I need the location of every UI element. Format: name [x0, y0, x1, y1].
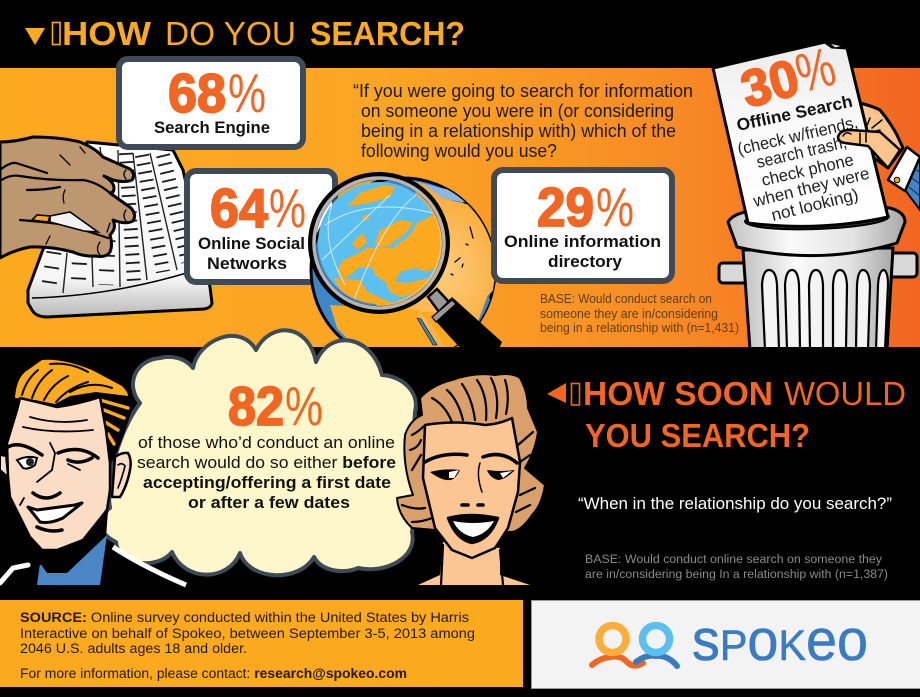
cloud text: 82% — [137, 375, 396, 512]
callout: 29% online information directory — [494, 170, 672, 281]
illustration: thumb, cuff and sleeve — [838, 118, 920, 210]
question text — [353, 81, 693, 161]
callout: 64% online social networks: 64 — [210, 177, 268, 239]
callout: 29% online information directory: directory — [548, 252, 623, 271]
icon: two linked people — [592, 626, 677, 666]
can handles — [719, 253, 917, 283]
base note: search question: being in a relationship with (n=1,431) — [540, 321, 739, 335]
panel: how do you search band — [0, 68, 920, 347]
callout: 68% search engine: % — [228, 62, 266, 124]
hand — [0, 137, 135, 258]
callout: 64% online social networks — [187, 171, 335, 282]
thought cloud — [101, 330, 416, 575]
heading: how do you search: HOW — [62, 15, 152, 52]
can ribs — [762, 270, 888, 350]
cloud text: 82%: accepting/offering a first date — [143, 474, 391, 492]
question: when in the relationship: “When in the relationship do you search?” — [578, 494, 892, 513]
paper: 30% offline search: when they were — [750, 164, 871, 211]
globe — [311, 178, 497, 362]
heading: how do you search — [25, 15, 465, 52]
paper: 30% offline search: % — [789, 35, 842, 105]
callout: 64% online social networks: Online Social — [198, 234, 305, 253]
magnifier handle — [426, 287, 502, 347]
cloud text: 82%: 82 — [228, 375, 284, 437]
callout: 68% search engine: Search Engine — [154, 118, 270, 137]
heading: how soon would you search: WOULD — [784, 375, 906, 412]
base note: search question — [540, 292, 739, 335]
illustration: winking man — [0, 359, 186, 585]
paper: 30% offline search: (check w/friends, — [736, 113, 860, 159]
panel: source: Interactive on behalf of Spokeo, between September 3-5, 2013 among — [20, 626, 475, 641]
can rim — [728, 204, 905, 256]
question text: following would you use? — [361, 141, 557, 161]
callout: 68% search engine: 68 — [168, 62, 226, 124]
keyboard — [28, 142, 212, 317]
paper: 30% offline search: not looking) — [769, 185, 860, 225]
heading: how soon would you search: YOU SEARCH? — [585, 417, 810, 454]
panel: source: SOURCE: Online survey conducted within the United States by Harris — [20, 610, 469, 625]
question text: on someone you were in (or considering — [361, 101, 674, 121]
illustration: hand holding paper (back) — [850, 103, 903, 168]
callout: 64% online social networks: % — [269, 177, 306, 239]
heading: how do you search: SEARCH? — [310, 15, 465, 52]
base note: search question: BASE: Would conduct search on — [540, 292, 712, 306]
cloud text: 82%: of those who’d conduct an online — [138, 434, 395, 452]
base note: online search — [585, 554, 888, 581]
illustration: smiling woman — [397, 374, 545, 585]
paper: 30% offline search: search trash, — [755, 133, 849, 172]
base note: online search: BASE: Would conduct online search on someone they — [585, 554, 882, 566]
panel: source: For more information, please contact: research@spokeo.com — [20, 666, 407, 681]
base note: online search: are in/considering being In a relationship with (n=1,387) — [585, 569, 888, 581]
callout: 68% search engine — [119, 59, 303, 147]
cloud text: 82%: or after a few dates — [188, 494, 350, 512]
panel: source — [0, 600, 523, 687]
heading: how do you search: DO YOU — [165, 15, 296, 52]
callout: 29% online information directory: Online information — [504, 232, 661, 251]
base note: search question: someone they are in/considering — [540, 307, 718, 321]
callout: 29% online information directory: 29 — [537, 176, 594, 238]
illustration: globe with magnifying glass — [311, 176, 502, 362]
question text: “If you were going to search for information — [353, 81, 693, 101]
callout: 29% online information directory: % — [596, 176, 634, 238]
paper: 30% offline search — [713, 35, 888, 226]
heading: how soon would you search: HOW SOON — [583, 375, 773, 412]
illustration: trash can — [719, 204, 917, 350]
callout: 64% online social networks: Networks — [207, 254, 287, 273]
panel: source: 2046 U.S. adults ages 18 and older. — [20, 641, 247, 656]
illustration: hand on keyboard — [0, 137, 212, 317]
can body — [743, 248, 893, 350]
paper: 30% offline search: Offline Search — [735, 92, 854, 135]
lens with map of Europe — [312, 176, 446, 310]
heading: how soon would you search — [547, 375, 906, 454]
paper: 30% offline search: 30 — [735, 49, 805, 120]
question text: being in a relationship with) which of the — [361, 121, 676, 141]
cloud text: 82%: % — [285, 375, 323, 437]
cloud text: 82%: search would do so either before — [137, 454, 396, 472]
paper: 30% offline search: check phone — [760, 150, 855, 190]
panel: spokeo logo — [532, 600, 920, 688]
wordmark: sPoKeo — [692, 608, 868, 673]
